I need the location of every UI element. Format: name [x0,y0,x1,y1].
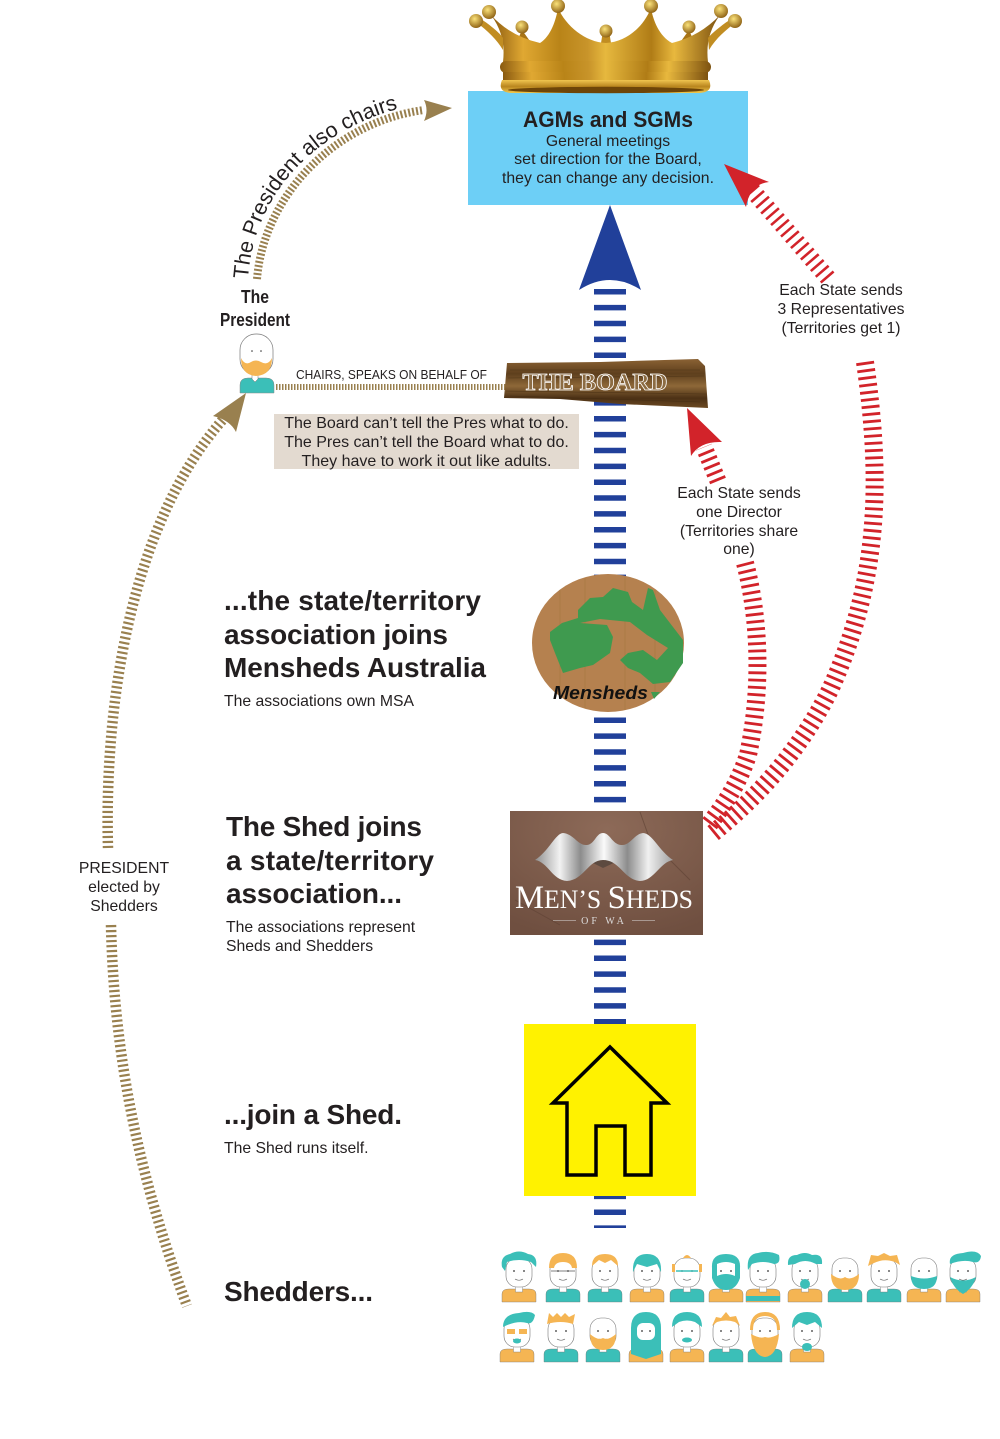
face 16 [629,1312,663,1362]
face 2 [546,1253,580,1302]
face 12 [946,1252,981,1302]
face 10 [867,1253,901,1302]
curved label: The President also chairs: The President also chairs [233,99,396,278]
face 6 [709,1254,743,1302]
face 13 [500,1312,535,1362]
icon: house [553,1047,667,1175]
group: shedders faces [500,1252,981,1362]
label: each state sends one director: one Director [696,504,782,521]
text: general meetings [502,133,714,187]
label: The President: President [220,310,290,330]
logo: Men's Sheds of WA [510,811,703,935]
logo: Mensheds Australia: Mensheds [553,683,648,703]
face 14 [544,1313,578,1362]
label: each state sends one director: (Territories share [680,523,798,540]
label: The President [220,287,290,330]
text: general meetings: General meetings [546,133,670,150]
face 5 [670,1255,704,1302]
face 8 [788,1253,822,1302]
callout: board and president: The Pres can’t tell the Board what to do. [284,434,569,451]
face 1 [502,1252,536,1302]
label: each state sends 3 representatives: 3 Representatives [778,301,905,318]
arrow: state representatives to AGMs [724,164,828,278]
label: each state sends 3 representatives [778,282,905,337]
face 19 [748,1312,782,1362]
vertical dashed spine [594,289,626,1228]
arrow: election upper [108,393,246,848]
logo: Men's Sheds of WA: MEN’S SHEDS [515,880,693,916]
text: Shed joins association: The associations represent [226,919,416,936]
text: state association joins: Mensheds Australia [224,652,486,683]
label: chairs, speaks on behalf of: CHAIRS, SPEAKS ON BEHALF OF [296,367,487,382]
connector: chairs line [276,384,506,390]
label: president elected by shedders: Shedders [90,898,158,915]
label: each state sends one director [677,485,801,558]
label: president elected by shedders [79,860,169,915]
logo: Mensheds Australia [532,574,684,712]
text: general meetings: they can change any decision. [502,170,714,187]
arrow: director curve [708,563,757,826]
text: Shed joins association: Sheds and Shedders [226,938,373,955]
face 18 [709,1312,743,1362]
text: state association joins [224,585,486,710]
face 9 [828,1258,862,1302]
face 15 [586,1318,620,1362]
label: each state sends 3 representatives: Each State sends [779,282,903,299]
text: Shed joins association [226,811,434,955]
text: Shed joins association: The Shed joins [226,811,422,842]
panel: AGMs and SGMs [468,91,748,205]
face 20 [790,1312,824,1362]
sign: The Board [504,359,708,408]
heading: AGMs and SGMs: AGMs and SGMs [523,107,693,132]
label: each state sends one director: Each State sends [677,485,801,502]
face 3 [588,1254,622,1302]
callout: board and president: They have to work it out like adults. [302,453,551,470]
text: join a Shed [224,1099,402,1157]
arrow: election lower [111,925,187,1306]
sign: The Board: THE BOARD [522,370,668,396]
text: join a Shed: ...join a Shed. [224,1099,402,1130]
icon: gold crown [469,0,742,93]
face 7 [746,1252,780,1302]
label: each state sends one director: one) [723,541,755,558]
face 17 [670,1312,704,1362]
label: The President: The [241,287,269,307]
panel: yellow shed icon [524,1024,696,1196]
face 11 [907,1258,941,1302]
label: Shedders: Shedders... [224,1276,373,1307]
callout: board and president: The Board can’t tell the Pres what to do. [284,415,569,432]
icon: president avatar [240,334,274,393]
text: Shed joins association: a state/territory [226,845,434,876]
label: president elected by shedders: PRESIDENT [79,860,169,877]
arrow: representatives curve [712,362,875,834]
text: join a Shed: The Shed runs itself. [224,1140,368,1157]
text: Shed joins association: association... [226,878,402,909]
arrow: president also chairs [257,100,452,279]
callout: board and president [274,414,579,470]
label: each state sends 3 representatives: (Territories get 1) [781,320,901,337]
icon: blue up arrow [579,205,641,290]
text: state association joins: association joins [224,619,448,650]
label: president elected by shedders: elected by [88,879,160,896]
text: state association joins: ...the state/territory [224,585,481,616]
logo: Men's Sheds of WA: OF WA [581,916,627,927]
arrow: state director to Board [687,408,722,481]
text: general meetings: set direction for the Board, [514,151,702,168]
text: state association joins: The associations own MSA [224,693,414,710]
face 4 [630,1254,664,1302]
